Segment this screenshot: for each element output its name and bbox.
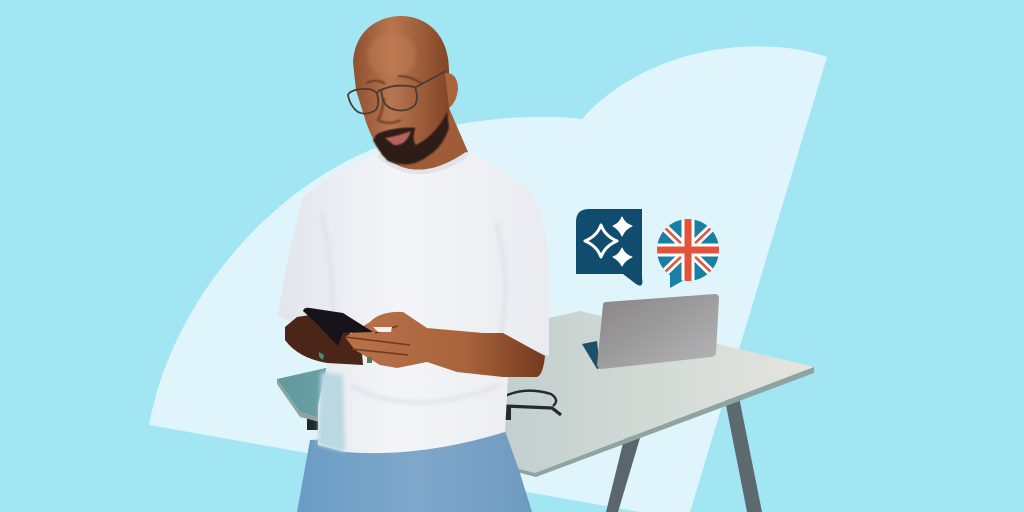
brow bbox=[366, 76, 422, 84]
head shape bbox=[353, 16, 449, 164]
neck bbox=[380, 108, 468, 173]
desk bbox=[277, 311, 814, 512]
phone bbox=[303, 308, 373, 346]
illustration scene bbox=[149, 16, 827, 512]
desk legs bbox=[307, 397, 762, 512]
person bbox=[278, 16, 549, 512]
nose bbox=[378, 98, 401, 123]
beard bbox=[373, 112, 449, 165]
light background shape bbox=[149, 46, 827, 512]
t-shirt bbox=[278, 152, 549, 453]
ear bbox=[445, 73, 458, 108]
fingers bbox=[345, 326, 410, 355]
glasses on desk bbox=[503, 391, 561, 420]
eyeglasses bbox=[348, 71, 446, 114]
jeans bbox=[297, 431, 532, 512]
left arm bbox=[285, 312, 363, 365]
moustache bbox=[377, 128, 415, 145]
forehead highlight bbox=[368, 33, 416, 77]
desk top bbox=[277, 311, 814, 473]
shirt folds bbox=[322, 214, 505, 402]
mouth bbox=[385, 131, 411, 145]
right arm and hand bbox=[345, 312, 545, 377]
icon: chat bubble with sparkles bbox=[576, 209, 642, 286]
icon: UK flag chat bubble bbox=[656, 218, 720, 288]
head bbox=[353, 16, 458, 165]
ring bbox=[319, 352, 324, 360]
shirt gap between fingers bbox=[373, 327, 392, 332]
laptop bbox=[582, 294, 719, 369]
